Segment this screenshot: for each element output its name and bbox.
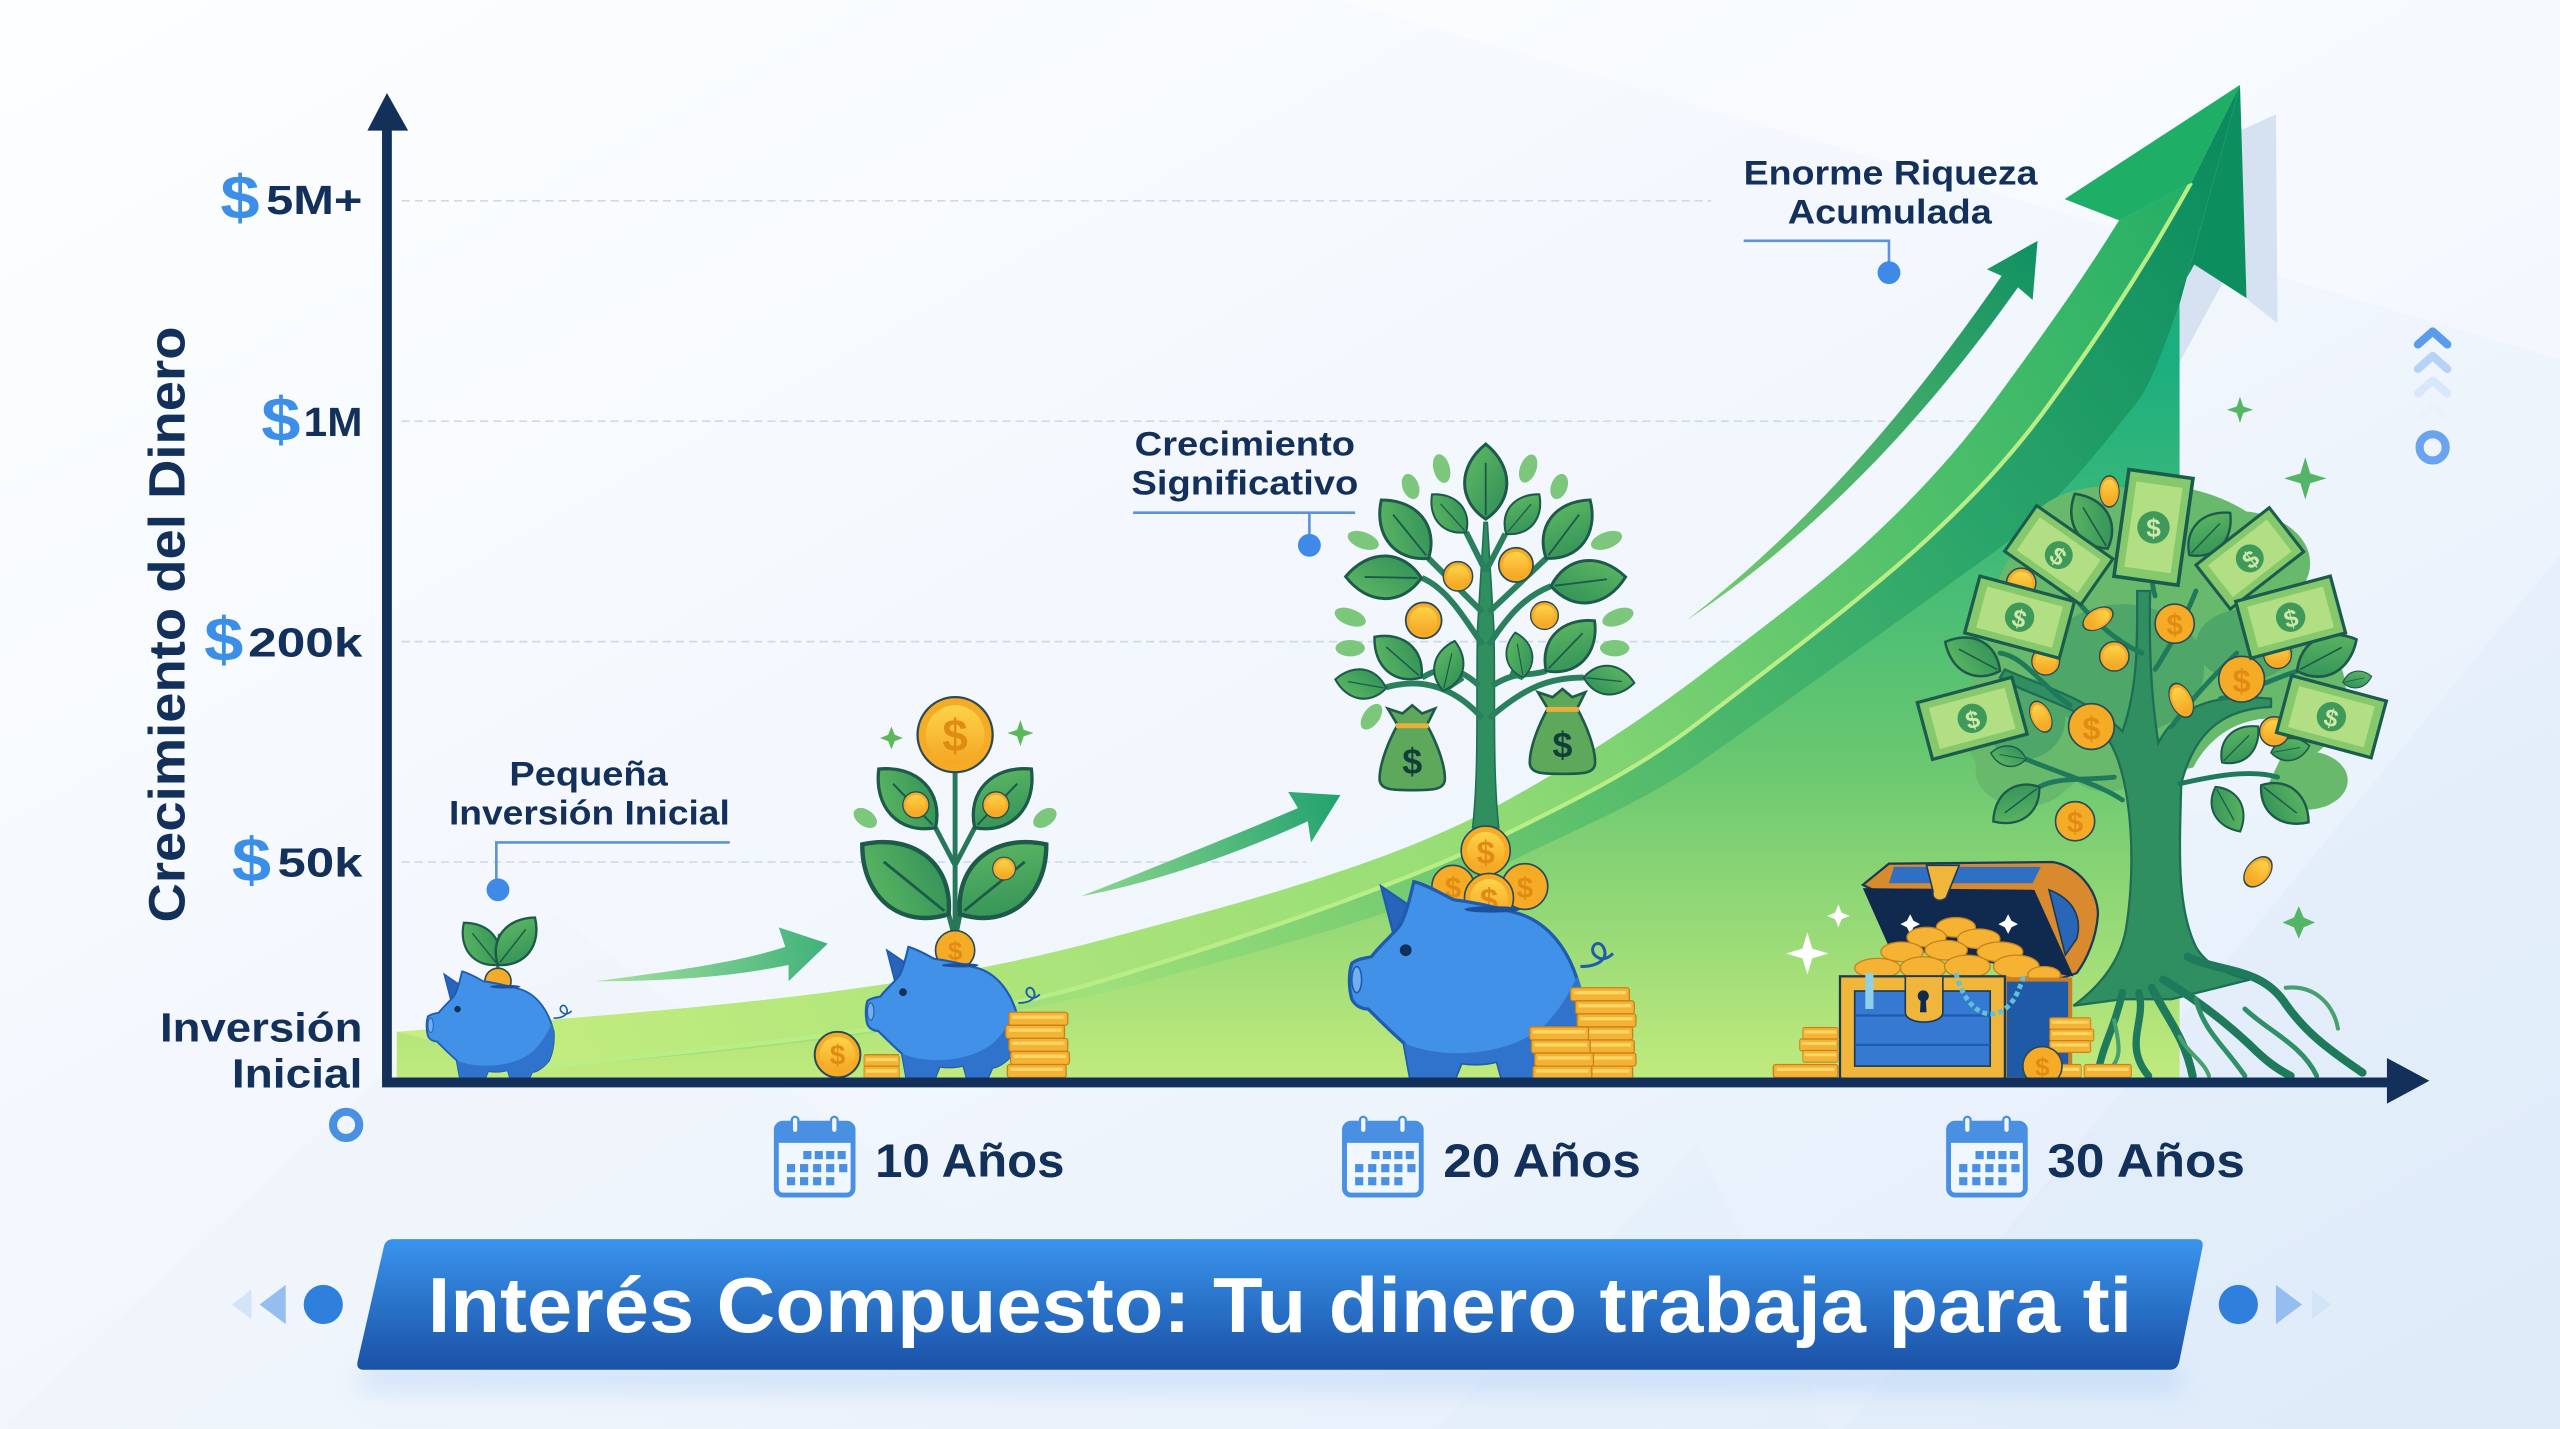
callout: significant growth bbox=[1131, 426, 1358, 557]
growth curve area and big arrow bbox=[397, 85, 2278, 1078]
coin plant: $ bbox=[942, 710, 968, 761]
callout: significant growth: Significativo bbox=[1131, 465, 1358, 503]
thin growth arrow 30 years bbox=[1687, 241, 2038, 620]
title banner bbox=[353, 1239, 2203, 1388]
coin stacks bbox=[1773, 1018, 2131, 1086]
y axis label 200k: $ bbox=[204, 606, 243, 675]
coins on tree: $ bbox=[2233, 662, 2251, 699]
x axis label 20 years: 20 Años bbox=[1443, 1135, 1641, 1188]
y axis label 200k bbox=[204, 606, 363, 675]
sparkles bbox=[2227, 397, 2327, 939]
coins on tree: $ bbox=[2167, 609, 2183, 642]
arrow head left half bbox=[2065, 85, 2240, 220]
y axis label 5M+: $ bbox=[220, 164, 260, 233]
bills: $ bbox=[2009, 605, 2029, 634]
axes bbox=[367, 93, 2429, 1104]
coin stacks bbox=[1530, 988, 1636, 1079]
tree leaves bbox=[1333, 444, 1636, 703]
piggy bank large with coin pile and stacks: $ bbox=[1517, 872, 1533, 905]
area fill bbox=[397, 183, 2191, 1078]
canopy bbox=[1964, 485, 2348, 810]
canopy inner shade bbox=[1984, 604, 2294, 759]
y axis label 200k: 200k bbox=[248, 619, 363, 665]
callout: small initial investment: Inversión Inicial bbox=[449, 794, 730, 832]
bills: $ bbox=[2321, 704, 2341, 734]
coin stacks: $ bbox=[2035, 1052, 2050, 1082]
banner decoration left bbox=[232, 1285, 343, 1324]
piggy bank large with coin pile and stacks: $ bbox=[1445, 872, 1461, 905]
y axis label 1M: 1M bbox=[304, 399, 362, 445]
money tree bbox=[1917, 397, 2386, 1076]
arrow head right half bbox=[2180, 85, 2247, 304]
coins on tree: $ bbox=[2067, 807, 2083, 840]
y axis label initial investment bbox=[160, 1005, 362, 1096]
piggy bank large with coin pile and stacks: $ bbox=[1477, 834, 1495, 871]
bills: $ bbox=[1963, 706, 1983, 735]
leaves bbox=[1937, 484, 2373, 838]
upper band bbox=[397, 183, 2191, 1068]
y axis label initial investment: Inversión bbox=[160, 1005, 362, 1051]
treasure chest bbox=[1773, 862, 2131, 1086]
y axis label 50k bbox=[232, 827, 363, 896]
coin stacks: $ bbox=[830, 1039, 846, 1070]
gap in canopy bbox=[2181, 718, 2286, 816]
trunk and limbs bbox=[2000, 591, 2271, 1006]
lid bbox=[1863, 862, 2098, 980]
callout: small initial investment bbox=[449, 755, 730, 901]
chest body bbox=[2005, 980, 2070, 1079]
decorative chevrons top right bbox=[2418, 331, 2447, 460]
y axis label 50k: $ bbox=[232, 827, 271, 896]
piggy bank medium with coin plant and stacks bbox=[815, 697, 1069, 1079]
y axis label 5M+: 5M+ bbox=[266, 177, 362, 223]
title text: Interés Compuesto: Tu dinero trabaja para ti bbox=[428, 1261, 2132, 1349]
money bag left bbox=[1380, 705, 1445, 790]
piggy bank small with sprout bbox=[427, 907, 572, 1080]
piggy bank large with coin pile and stacks: $ bbox=[1480, 881, 1498, 918]
bills: $ bbox=[2146, 513, 2161, 543]
x axis label 30 years bbox=[1949, 1117, 2245, 1195]
bills bbox=[1917, 469, 2386, 759]
money bag right: $ bbox=[1552, 725, 1572, 766]
dark band bbox=[540, 85, 2240, 1068]
arrow 20 years bbox=[1081, 792, 1340, 896]
coin plant bbox=[843, 697, 1066, 939]
x axis label 10 years bbox=[776, 1117, 1064, 1195]
piggy bank large with coin pile and stacks bbox=[1349, 826, 1636, 1079]
coin stacks bbox=[815, 1012, 1069, 1079]
highlight line bbox=[540, 183, 2191, 1068]
horizontal grid lines bbox=[402, 201, 1984, 862]
x axis label 10 years: 10 Años bbox=[875, 1135, 1064, 1188]
y axis label initial investment: Inicial bbox=[232, 1050, 362, 1096]
white sparkles bbox=[1786, 904, 1850, 975]
coins on tree: $ bbox=[2082, 710, 2100, 747]
y axis label 50k: 50k bbox=[278, 840, 363, 886]
gold pile bbox=[1855, 918, 2060, 983]
dollar tree bbox=[1332, 444, 1636, 828]
y axis label 1M bbox=[261, 386, 362, 455]
money bag right bbox=[1530, 689, 1595, 774]
callout: enormous wealth: Enorme Riqueza bbox=[1744, 154, 2039, 192]
coins on tree bbox=[2007, 476, 2291, 892]
callout: enormous wealth bbox=[1744, 154, 2039, 284]
y axis label 1M: $ bbox=[261, 386, 300, 455]
banner decoration right bbox=[2219, 1285, 2331, 1324]
callout: enormous wealth: Acumulada bbox=[1788, 194, 1993, 232]
y axis label 5M+ bbox=[220, 164, 362, 233]
y axis title: Crecimiento del Dinero bbox=[138, 327, 195, 922]
callout: small initial investment: Pequeña bbox=[509, 755, 669, 793]
bills: $ bbox=[2238, 545, 2265, 575]
arrow 10 years bbox=[596, 927, 828, 981]
piggy bank medium with coin plant and stacks: $ bbox=[948, 936, 963, 966]
roots and branches bbox=[2000, 555, 2362, 1076]
money bag left: $ bbox=[1402, 741, 1422, 782]
callout: significant growth: Crecimiento bbox=[1135, 426, 1355, 464]
x axis label 20 years bbox=[1344, 1117, 1641, 1195]
origin ring bbox=[333, 1112, 359, 1138]
x axis label 30 years: 30 Años bbox=[2047, 1135, 2245, 1188]
bills: $ bbox=[2044, 542, 2071, 572]
bills: $ bbox=[2281, 604, 2302, 634]
